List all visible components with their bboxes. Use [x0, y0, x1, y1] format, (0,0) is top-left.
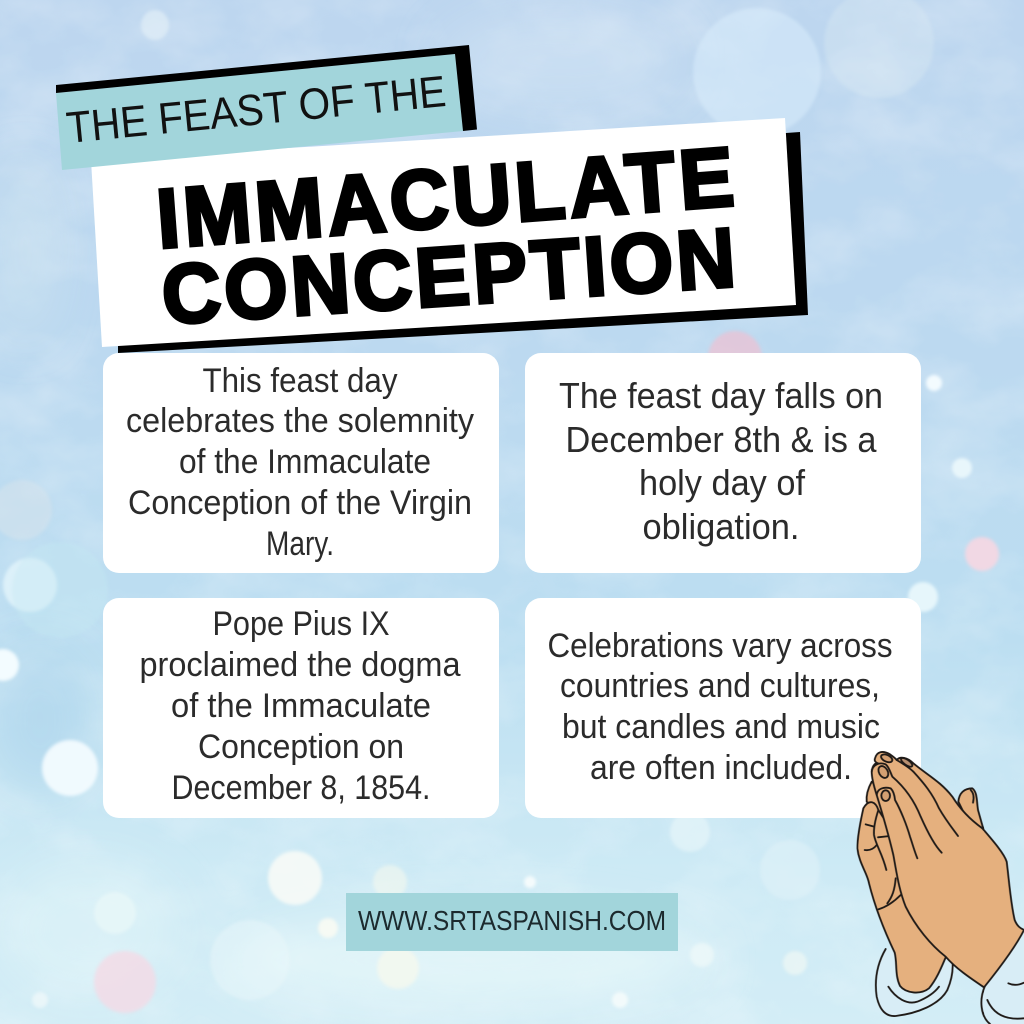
- front hand: [872, 752, 1024, 987]
- card: Pope Pius IX proclamation: proclaimed the dogma: [140, 646, 461, 684]
- card: what the feast celebrates: [103, 353, 499, 573]
- card: celebrations: countries and cultures,: [560, 667, 880, 705]
- website footer label: WWW.SRTASPANISH.COM: [358, 905, 666, 936]
- back finger: [867, 782, 886, 817]
- right cuff: [981, 933, 1024, 1024]
- finger creases: [877, 788, 917, 858]
- card: Pope Pius IX proclamation: Conception on: [198, 728, 404, 766]
- card: what the feast celebrates: This feast day: [202, 362, 398, 400]
- card: what the feast celebrates: celebrates the solemnity: [126, 402, 474, 440]
- card: Pope Pius IX proclamation: Pope Pius IX: [212, 605, 390, 643]
- card: date of the feast: The feast day falls on: [559, 375, 883, 416]
- card: what the feast celebrates: Conception of the Virgin: [128, 484, 472, 522]
- card: Pope Pius IX proclamation: [103, 598, 499, 818]
- left cuff: [876, 949, 953, 1016]
- website footer label: [346, 893, 678, 951]
- card: celebrations: Celebrations vary across: [548, 627, 892, 665]
- card: celebrations: are often included.: [590, 749, 852, 787]
- card: date of the feast: obligation.: [642, 506, 800, 547]
- subtitle text: THE FEAST OF THE: [64, 67, 448, 153]
- card: date of the feast: [525, 353, 921, 573]
- title line 1: IMMACULATE: [153, 129, 737, 266]
- icon: praying hands: [857, 752, 1024, 1024]
- title banner: Immaculate Conception: [91, 118, 808, 353]
- card: celebrations: [525, 598, 921, 818]
- back hand: [857, 802, 946, 993]
- card: celebrations: but candles and music: [562, 708, 880, 746]
- fingernails: [880, 753, 894, 764]
- thumb: [958, 788, 983, 829]
- card: Pope Pius IX proclamation: December 8, 1854.: [172, 769, 430, 807]
- title line 2: CONCEPTION: [159, 210, 738, 342]
- card: date of the feast: December 8th & is a: [566, 419, 877, 460]
- card: Pope Pius IX proclamation: of the Immaculate: [171, 687, 431, 725]
- subtitle banner: The Feast of the: [56, 45, 477, 170]
- card: what the feast celebrates: of the Immaculate: [179, 443, 431, 481]
- card: date of the feast: holy day of: [639, 462, 806, 503]
- card: what the feast celebrates: Mary.: [266, 525, 334, 563]
